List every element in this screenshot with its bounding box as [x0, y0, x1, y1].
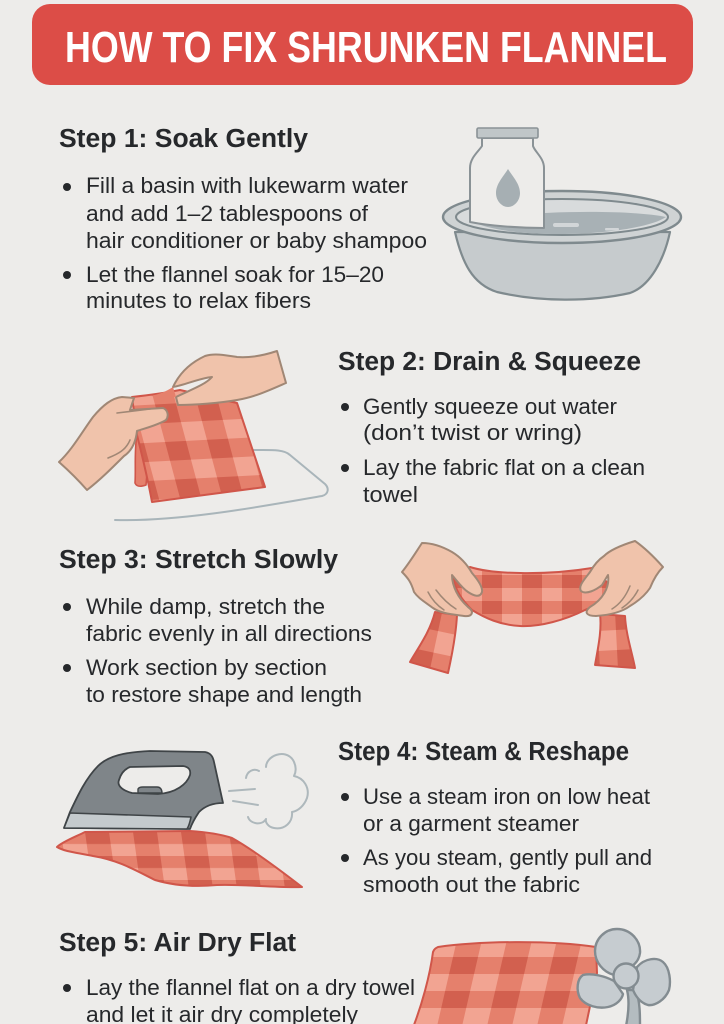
bullet list: step 3 — [63, 594, 372, 707]
bullet list: step 1: Fill a basin with lukewarm water — [86, 173, 409, 198]
bullet list: step 4: As you steam, gently pull and — [363, 845, 652, 870]
panel: step 1 text — [59, 125, 427, 313]
bullet list: step 2: Gently squeeze out water — [363, 394, 617, 419]
bullet list: step 4: or a garment steamer — [363, 811, 580, 836]
bullet list: step 4 — [341, 784, 652, 897]
panel: step 3 text — [59, 546, 372, 707]
icon: steam cloud — [229, 754, 308, 828]
bullet list: step 3: fabric evenly in all directions — [86, 621, 372, 646]
icon: steam iron on flannel — [57, 751, 308, 887]
panel: step 5 text — [59, 929, 415, 1024]
icon: flannel drying by fan — [412, 929, 670, 1024]
bullet list: step 3: to restore shape and length — [86, 682, 362, 707]
panel: step 4 text — [338, 738, 652, 897]
icon: fan — [578, 929, 670, 1024]
heading: step 1: Step 1: Soak Gently — [59, 125, 309, 153]
bullet list: step 5: Lay the flannel flat on a dry towel — [86, 975, 415, 1000]
bullet list: step 1: and add 1–2 tablespoons of — [86, 201, 369, 226]
bullet list: step 2 — [341, 394, 645, 507]
bullet list: step 5 — [63, 975, 415, 1024]
bullet list: step 1: hair conditioner or baby shampoo — [86, 228, 427, 253]
heading: step 5: Step 5: Air Dry Flat — [59, 929, 297, 957]
heading: step 2: Step 2: Drain & Squeeze — [338, 348, 641, 376]
bullet list: step 4: Use a steam iron on low heat — [363, 784, 651, 809]
bullet list: step 4: smooth out the fabric — [363, 872, 580, 897]
bullet list: step 3: While damp, stretch the — [86, 594, 325, 619]
bullet list: step 2: (don’t twist or wring) — [363, 420, 582, 445]
panel: step 2 text — [338, 348, 645, 507]
heading: step 4: Step 4: Steam & Reshape — [338, 738, 629, 766]
title banner — [32, 4, 693, 85]
bullet list: step 3: Work section by section — [86, 655, 327, 680]
icon: basin with conditioner bottle — [443, 128, 681, 300]
bullet list: step 1 — [63, 173, 427, 313]
bullet list: step 2: Lay the fabric flat on a clean — [363, 455, 645, 480]
icon: hands squeezing flannel over towel — [59, 351, 328, 520]
bullet list: step 1: minutes to relax fibers — [86, 288, 311, 313]
heading: step 3: Step 3: Stretch Slowly — [59, 546, 339, 574]
icon: hands stretching flannel — [402, 541, 663, 673]
bullet list: step 2: towel — [363, 482, 418, 507]
bullet list: step 1: Let the flannel soak for 15–20 — [86, 262, 384, 287]
